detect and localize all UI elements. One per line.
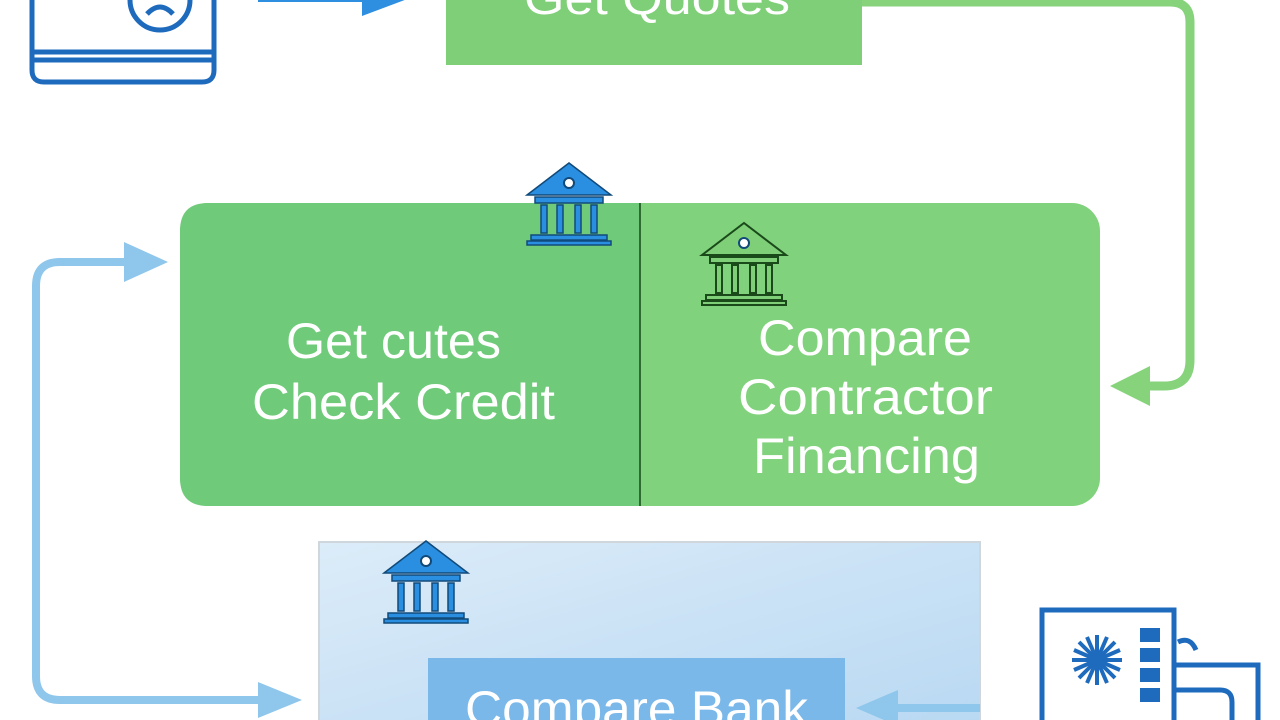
text: right: Contractor: [738, 369, 993, 425]
text: left: Check Credit: [252, 374, 555, 430]
arrow: top blue: [258, 0, 410, 16]
text: right: Compare: [758, 310, 972, 366]
text: right: [738, 310, 993, 484]
arrow: left blue loop: [36, 242, 302, 718]
icon: monitor with sad face: [32, 0, 214, 82]
icon: bank blue bottom: [384, 541, 468, 623]
icon: bank blue top: [527, 163, 611, 245]
panel: main green: [180, 203, 1100, 506]
arrow: bottom right: [856, 690, 980, 720]
arrow: green right loop: [862, 2, 1190, 406]
text: left: Get cutes: [286, 313, 501, 369]
icon: bank green: [702, 223, 786, 305]
text: left: [252, 313, 555, 430]
box: Get Quotes: [446, 0, 862, 65]
icon: AC unit: [1042, 610, 1258, 720]
panel: bottom bank: [319, 542, 980, 720]
text: right: Financing: [753, 428, 980, 484]
